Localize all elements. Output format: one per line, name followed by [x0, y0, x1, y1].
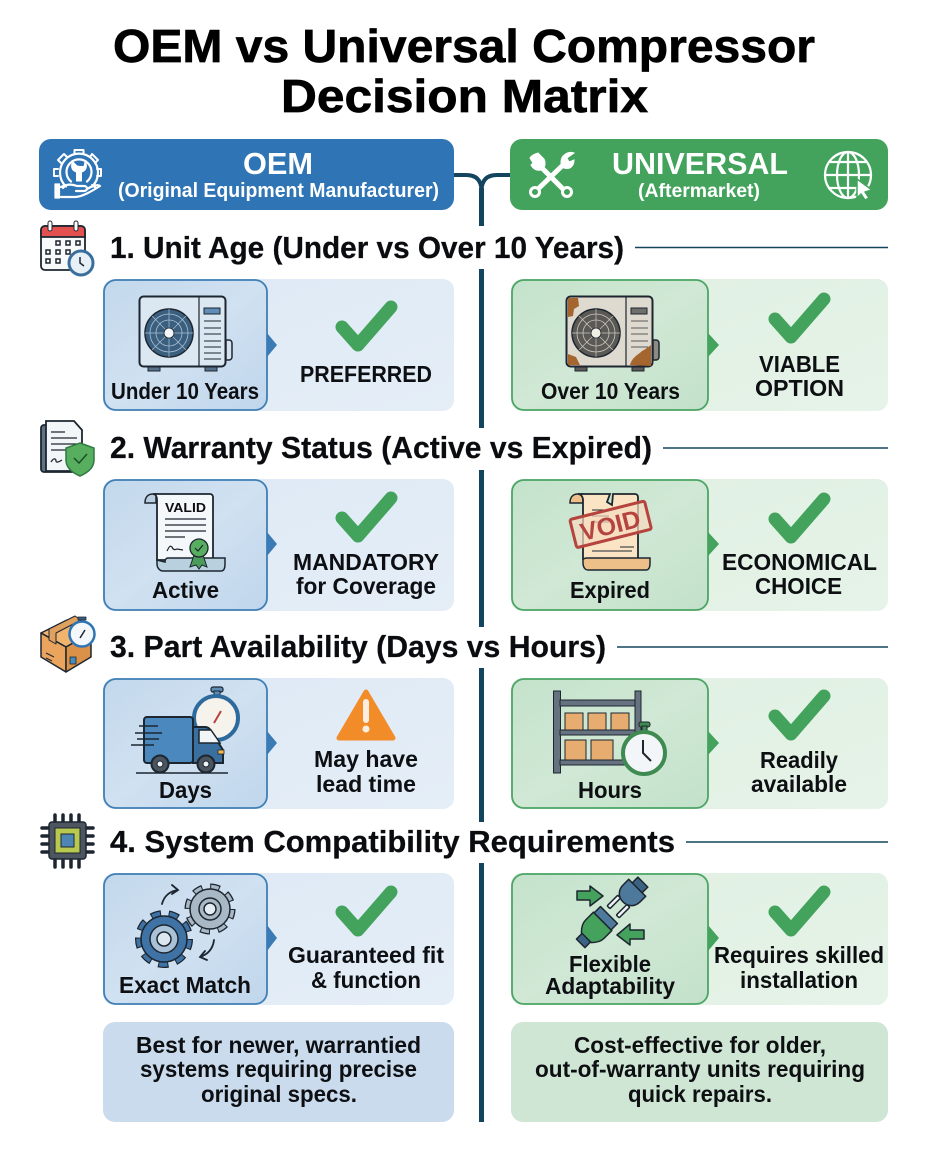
summary: Universal: quick repairs.: [628, 1081, 772, 1107]
icon: void expired scroll: [570, 494, 652, 570]
icon: check mark: [775, 299, 824, 337]
heading text: 3. Part Availability (Days vs Hours): [110, 629, 606, 664]
section heading 4: [42, 815, 888, 867]
label: Over 10 Years: [541, 378, 680, 404]
VOID stamp: VOID: [577, 505, 644, 547]
text: OEM: OEM: [243, 146, 313, 181]
verdict: ECONOMICAL: [722, 549, 877, 575]
section heading 3: [41, 616, 888, 672]
text: Universal: UNIVERSAL: [612, 146, 788, 181]
row 3 OEM panel: lead time: [316, 771, 416, 797]
icon: warning triangle: [339, 692, 393, 738]
row 4 Universal panel: installation: [740, 967, 858, 993]
row 4 Universal panel: Adaptability: [545, 973, 675, 999]
text: Universal subtitle: (Aftermarket): [638, 181, 760, 202]
summary: Universal: Cost-effective for older,: [574, 1032, 826, 1058]
title: OEM vs Universal Compressor: [113, 20, 815, 72]
row 2 OEM panel: [103, 479, 454, 611]
icon: globe with cursor: [825, 152, 872, 200]
icon: gear and hand with wrench: [54, 150, 101, 198]
summary: Universal: out-of-warranty units requiring: [535, 1056, 865, 1082]
row 4 Universal panel: [511, 873, 888, 1005]
center connector line: [454, 175, 510, 1122]
row 2 Universal panel: [511, 479, 888, 611]
label: Exact Match: [119, 972, 251, 998]
title: Decision Matrix: [281, 70, 648, 122]
heading text: 1. Unit Age (Under vs Over 10 Years): [110, 230, 624, 265]
row 3 Universal panel: available: [751, 771, 847, 797]
icon: check mark: [342, 498, 391, 536]
summary: OEM: original specs.: [201, 1081, 357, 1107]
icon: crossed tools: [530, 152, 574, 196]
verdict: VIABLE: [759, 351, 840, 377]
icon: microchip: [42, 815, 93, 867]
row 1 Universal panel: [511, 279, 888, 411]
title: [113, 20, 815, 122]
label: Under 10 Years: [111, 378, 259, 404]
header: Universal: [510, 139, 888, 210]
icon: check mark: [342, 892, 391, 930]
summary: Universal: [511, 1022, 888, 1122]
heading text: 4. System Compatibility Requirements: [110, 824, 675, 859]
icon: meshing gears: [139, 885, 232, 964]
icon: check mark: [775, 499, 824, 537]
row 2 Universal panel: CHOICE: [755, 573, 842, 599]
icon: document with shield: [41, 421, 94, 476]
icon: parcel box with stopwatch: [41, 616, 94, 672]
row 1 OEM panel: [103, 279, 454, 411]
icon: valid warranty scroll: [145, 494, 225, 571]
icon: check mark: [775, 892, 824, 930]
verdict: PREFERRED: [300, 361, 432, 387]
icon: check mark: [775, 696, 824, 734]
row 4 OEM panel: & function: [311, 967, 421, 993]
row 2 OEM panel: for Coverage: [296, 573, 436, 599]
summary: OEM: systems requiring precise: [140, 1056, 417, 1082]
verdict: MANDATORY: [293, 549, 439, 575]
row 4 OEM panel: [103, 873, 454, 1005]
icon: valid warranty scroll: VALID: [165, 500, 206, 515]
icon: rusty AC outdoor unit: [566, 296, 659, 371]
icon: new AC outdoor unit: [140, 296, 232, 371]
row 3 Universal panel: [511, 678, 888, 809]
row 1 Universal panel: OPTION: [755, 375, 844, 401]
label: Days: [159, 777, 212, 803]
icon: check mark: [342, 307, 391, 345]
header: OEM: [39, 139, 454, 210]
verdict: Guaranteed fit: [288, 942, 444, 968]
label: Active: [152, 577, 219, 603]
verdict: May have: [314, 746, 418, 772]
verdict: Readily: [760, 747, 838, 773]
section heading 2: [41, 421, 888, 476]
heading text: 2. Warranty Status (Active vs Expired): [110, 430, 652, 465]
summary: OEM: Best for newer, warrantied: [136, 1032, 421, 1058]
summary: OEM: [103, 1022, 454, 1122]
icon: plug and socket with arrows: [571, 874, 651, 953]
icon: calendar and clock: [41, 221, 93, 275]
icon: stocked shelf with clock: [554, 691, 665, 774]
row 3 OEM panel: [103, 678, 454, 809]
text: OEM subtitle: (Original Equipment Manufacturer): [118, 180, 439, 202]
verdict: Requires skilled: [714, 942, 884, 968]
label: Hours: [578, 777, 642, 803]
section heading 1: [41, 221, 888, 275]
label: Expired: [570, 577, 650, 603]
label: Flexible: [569, 951, 651, 977]
icon: delivery truck with stopwatch: [131, 687, 238, 773]
